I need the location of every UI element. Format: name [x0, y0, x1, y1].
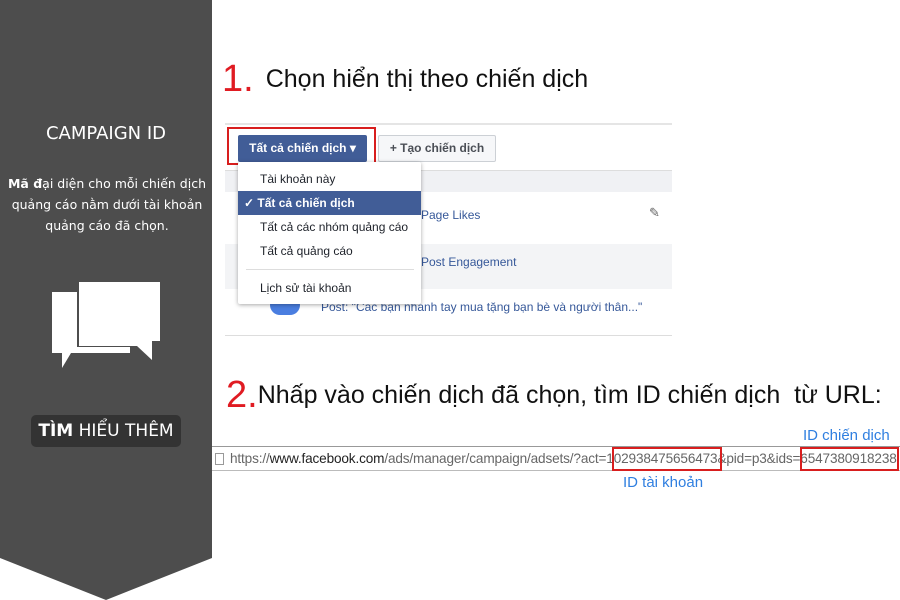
screenshot: facebook ads manager: Page Likes [421, 208, 480, 222]
button: tìm hiểu thêm: TÌM HIỂU THÊM [38, 421, 174, 441]
icon: speech bubbles [52, 282, 160, 368]
label: ID tài khoản: ID tài khoản [623, 474, 703, 491]
label: ID chiến dịch: ID chiến dịch [803, 427, 890, 444]
panel: sidebar [0, 0, 212, 600]
button: tạo chiến dịch [378, 135, 496, 162]
screenshot: facebook ads manager: Post Engagement [421, 255, 516, 269]
sidebar description: Mã đại diện cho mỗi chiến dịch quảng cáo nằm dưới tài khoản quảng cáo đã chọn. [8, 176, 206, 233]
highlight box: dropdown [227, 127, 376, 165]
url bar: https://www.facebook.com/ads/manager/campaign/adsets/?act=102938475656473&pid=p3&ids=6547380918238 [230, 451, 897, 466]
screenshot: facebook ads manager [225, 123, 672, 337]
screenshot: facebook ads manager: Post: "Các bạn nhanh tay mua tặng bạn bè và người thân..." [321, 300, 642, 314]
dropdown menu [238, 162, 421, 304]
highlight: campaign id [800, 447, 899, 471]
button: tất cả chiến dịch [238, 135, 367, 162]
heading: step 2: 2.Nhấp vào chiến dịch đã chọn, tìm ID chiến dịch từ URL: [226, 374, 882, 416]
url bar [212, 446, 900, 471]
screenshot: facebook ads manager: ✎ [649, 205, 660, 220]
button: tất cả chiến dịch: Tất cả chiến dịch ▾ [249, 141, 356, 155]
button: tạo chiến dịch: + Tạo chiến dịch [390, 141, 484, 155]
highlight: account id [612, 447, 722, 471]
button: tìm hiểu thêm [31, 415, 181, 447]
dropdown menu: Tất cả các nhóm quảng cáo [260, 220, 408, 234]
dropdown menu: Tài khoản này [260, 172, 335, 186]
dropdown menu: ✓ Tất cả chiến dịch [244, 196, 355, 210]
sidebar heading: CAMPAIGN ID [46, 123, 166, 144]
dropdown menu: Tất cả quảng cáo [260, 244, 353, 258]
heading: step 1: 1. Chọn hiển thị theo chiến dịch [222, 58, 588, 100]
dropdown menu: Lịch sử tài khoản [260, 281, 351, 295]
